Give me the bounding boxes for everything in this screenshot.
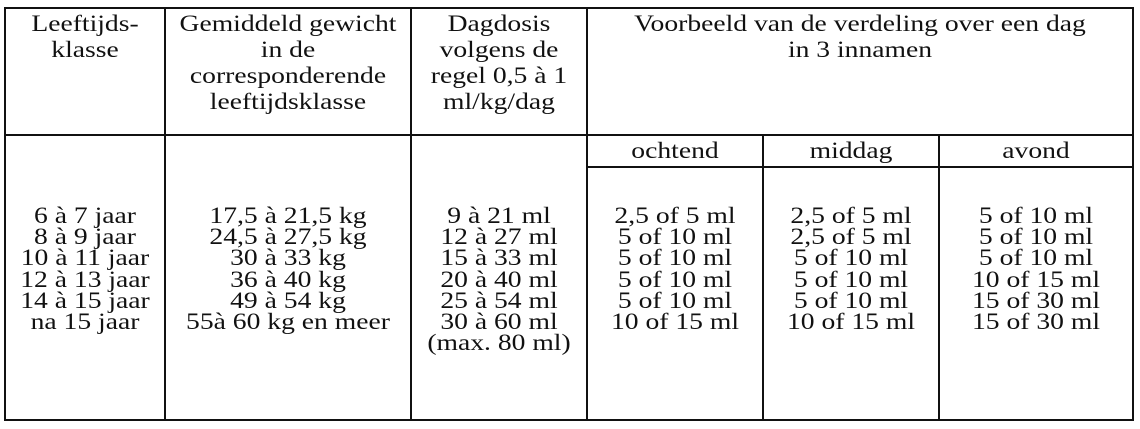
- header: gewicht: in de: [261, 37, 315, 62]
- column: avond: [972, 203, 1100, 334]
- column: dagdosis: 9 à 21 ml: [447, 203, 551, 228]
- column: avond: 15 of 30 ml: [972, 288, 1100, 313]
- header: voorbeeld: in 3 innamen: [788, 37, 932, 62]
- column: ochtend: 5 of 10 ml: [618, 288, 732, 313]
- subheader: middag: middag: [810, 138, 892, 163]
- subheader: avond: avond: [1002, 138, 1070, 163]
- column: leeftijd: 14 à 15 jaar: [20, 288, 150, 313]
- column: avond: 5 of 10 ml: [979, 224, 1093, 249]
- column: gewicht: [186, 203, 390, 334]
- column: dagdosis: (max. 80 ml): [427, 330, 571, 355]
- header: gewicht: leeftijdsklasse: [210, 89, 366, 114]
- header: leeftijdsklasse: Leeftijds-: [31, 11, 139, 36]
- header: voorbeeld: Voorbeeld van de verdeling over een dag: [634, 11, 1086, 36]
- column: middag: [787, 203, 915, 334]
- column: leeftijd: na 15 jaar: [31, 309, 139, 334]
- subheader: ochtend: ochtend: [631, 138, 719, 163]
- column: ochtend: 5 of 10 ml: [618, 267, 732, 292]
- column: avond: 15 of 30 ml: [972, 309, 1100, 334]
- column: dagdosis: 25 à 54 ml: [440, 288, 558, 313]
- column: leeftijd: [20, 203, 150, 334]
- column: ochtend: [611, 203, 739, 334]
- header: gewicht: [180, 11, 396, 114]
- header: dagdosis: regel 0,5 à 1: [431, 63, 567, 88]
- column: middag: 10 of 15 ml: [787, 309, 915, 334]
- column: dagdosis: 12 à 27 ml: [440, 224, 558, 249]
- column: avond: 5 of 10 ml: [979, 203, 1093, 228]
- column: middag: 5 of 10 ml: [794, 245, 908, 270]
- header: dagdosis: [431, 11, 567, 114]
- column: ochtend: 5 of 10 ml: [618, 245, 732, 270]
- column: gewicht: 24,5 à 27,5 kg: [209, 224, 367, 249]
- column: gewicht: 55à 60 kg en meer: [186, 309, 390, 334]
- header: dagdosis: Dagdosis: [448, 11, 550, 36]
- header: gewicht: Gemiddeld gewicht: [180, 11, 396, 36]
- column: ochtend: 2,5 of 5 ml: [614, 203, 736, 228]
- header: dagdosis: volgens de: [440, 37, 558, 62]
- column: ochtend: 5 of 10 ml: [618, 224, 732, 249]
- column: leeftijd: 10 à 11 jaar: [21, 245, 149, 270]
- column: leeftijd: 8 à 9 jaar: [34, 224, 136, 249]
- header: dagdosis: ml/kg/dag: [443, 89, 555, 114]
- column: dagdosis: 15 à 33 ml: [440, 245, 558, 270]
- column: avond: 5 of 10 ml: [979, 245, 1093, 270]
- column: dagdosis: 30 à 60 ml: [440, 309, 558, 334]
- column: middag: 2,5 of 5 ml: [790, 224, 912, 249]
- column: gewicht: 30 à 33 kg: [230, 245, 346, 270]
- column: leeftijd: 12 à 13 jaar: [20, 267, 150, 292]
- column: middag: 5 of 10 ml: [794, 267, 908, 292]
- column: gewicht: 17,5 à 21,5 kg: [209, 203, 367, 228]
- column: middag: 2,5 of 5 ml: [790, 203, 912, 228]
- column: gewicht: 49 à 54 kg: [230, 288, 346, 313]
- header: leeftijdsklasse: [31, 11, 139, 62]
- column: gewicht: 36 à 40 kg: [230, 267, 346, 292]
- header: gewicht: corresponderende: [190, 63, 386, 88]
- column: avond: 10 of 15 ml: [972, 267, 1100, 292]
- column: middag: 5 of 10 ml: [794, 288, 908, 313]
- column: ochtend: 10 of 15 ml: [611, 309, 739, 334]
- header: voorbeeld: [634, 11, 1086, 62]
- column: dagdosis: [427, 203, 571, 355]
- header: leeftijdsklasse: klasse: [51, 37, 119, 62]
- column: dagdosis: 20 à 40 ml: [440, 267, 558, 292]
- column: leeftijd: 6 à 7 jaar: [34, 203, 136, 228]
